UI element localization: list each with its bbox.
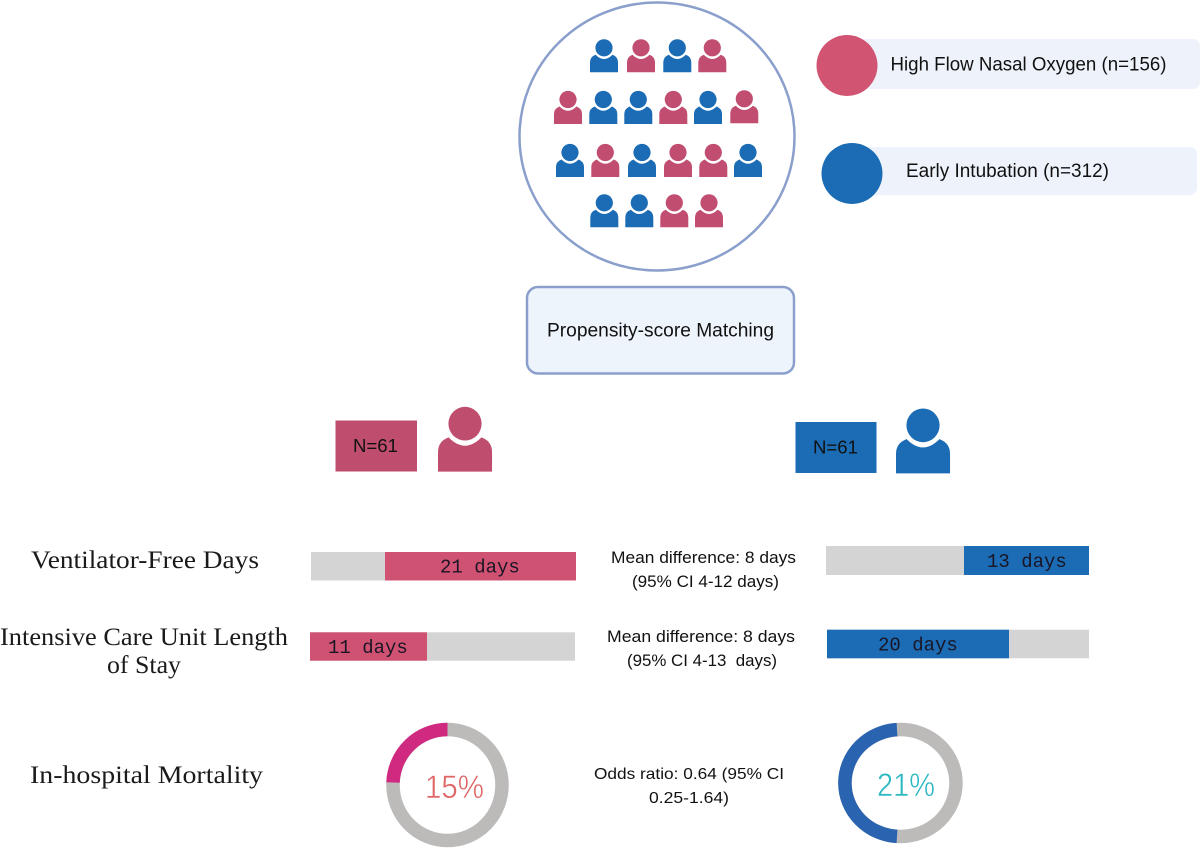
text: ventilator-free mean difference: Mean difference: 8 days [611,549,796,567]
bar: ventilator-free days, intubation: 13 days [987,551,1067,573]
bar: ventilator-free days, intubation [826,546,1089,575]
text: odds ratio: 0.25-1.64) [649,790,729,807]
legend: early intubation [822,143,1197,204]
circle outline [520,2,794,270]
matched group: early intubation [796,409,950,473]
icon: person [438,407,492,472]
row label: ventilator-free days: Ventilator-Free Days [31,547,259,574]
panel: study population circle [520,2,794,270]
donut: intubation mortality 21%: 21% [877,767,935,803]
text: ventilator-free mean difference: (95% CI 4-12 days) [632,573,779,591]
icon: person [896,409,950,473]
row label: intensive care unit length of stay: of Stay [107,652,182,679]
text: odds ratio [594,766,784,807]
row label: intensive care unit length of stay: Intensive Care Unit Length [0,624,289,651]
legend: high flow nasal oxygen: High Flow Nasal Oxygen (n=156) [890,54,1166,76]
text: icu mean difference: Mean difference: 8 days [607,628,795,646]
donut: high flow mortality 15% [393,730,502,840]
count box [336,420,417,472]
icons: population row 2 [554,90,758,124]
text: icu mean difference [607,628,795,670]
text: ventilator-free mean difference [611,549,796,591]
bar: icu length of stay, intubation [827,630,1089,658]
bar: ventilator-free days, high flow: 21 days [440,556,520,578]
legend: early intubation: Early Intubation (n=312) [906,161,1109,182]
bar: icu length of stay, high flow: 11 days [328,637,408,659]
row label: intensive care unit length of stay [0,624,289,679]
matched group: high flow nasal oxygen [336,407,492,472]
icons: population row 3 [556,144,762,177]
donut: high flow mortality 15%: 15% [425,769,484,805]
text: odds ratio: Odds ratio: 0.64 (95% CI [594,766,784,783]
row label: in-hospital mortality: In-hospital Mortality [30,762,264,789]
bar: icu length of stay, intubation: 20 days [878,635,958,657]
icons: population row 4 [590,194,723,227]
count box: N=61 [353,436,398,456]
propensity-score matching box: Propensity-score Matching [547,320,774,342]
legend: high flow nasal oxygen [816,35,1200,96]
count box [796,422,876,473]
text: icu mean difference: (95% CI 4-13 days) [627,652,777,670]
bar: icu length of stay, high flow [310,632,575,661]
propensity-score matching box [527,287,794,374]
bar: ventilator-free days, high flow [311,552,576,580]
donut: intubation mortality 21% [845,730,956,836]
count box: N=61 [813,438,858,458]
icons: population row 1 [590,39,726,72]
